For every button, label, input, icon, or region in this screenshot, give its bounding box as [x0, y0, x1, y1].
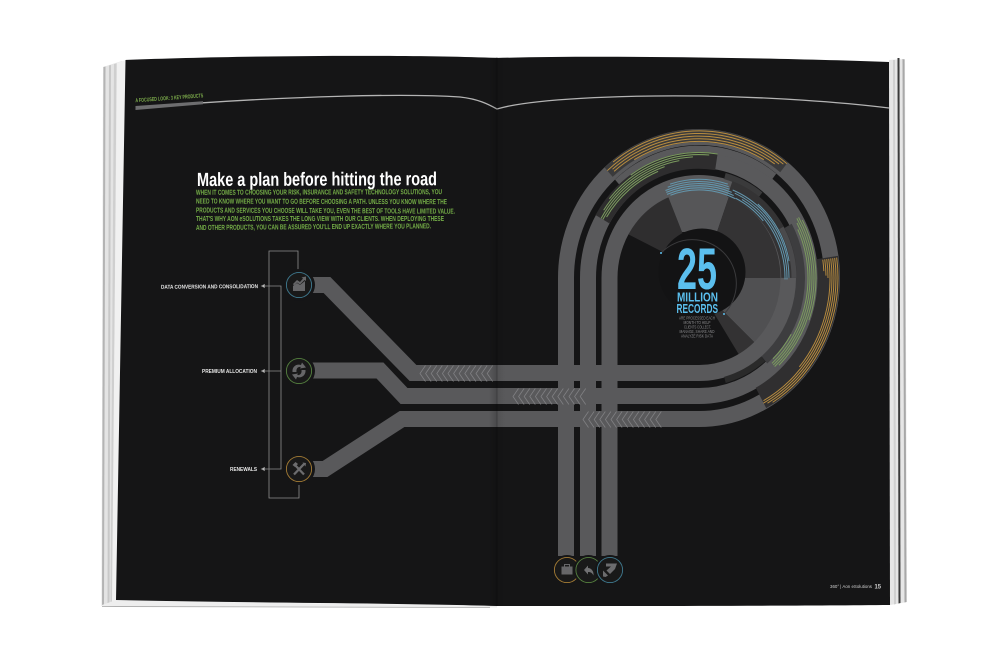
icon: briefcase badge	[552, 555, 582, 585]
page footer: 15	[874, 583, 881, 590]
left page	[116, 56, 497, 606]
data rings	[503, 71, 895, 485]
right page stack edge	[889, 58, 907, 605]
hub: 25 million records: MILLION	[677, 290, 718, 304]
section header: a focused look: A FOCUSED LOOK: 3 KEY PRODUCTS	[135, 93, 204, 104]
labels: products	[161, 284, 258, 473]
road: middle green route	[310, 160, 810, 556]
roads	[310, 137, 832, 556]
hub: 25 million records: CLIENTS COLLECT,	[684, 324, 711, 330]
hub: 25 million records: ARE PROCESSED EACH	[679, 316, 715, 320]
hub: 25 million records: RECORDS	[676, 302, 718, 316]
section header: a focused look	[135, 93, 889, 110]
icon: double arrow badge	[595, 555, 625, 585]
icon: return arrow badge	[574, 555, 604, 585]
gutter shadow	[489, 57, 505, 606]
wedges around hub	[628, 191, 780, 354]
hub: 25 million records	[658, 228, 746, 338]
right page	[497, 57, 890, 606]
chevrons on roads	[420, 366, 661, 428]
icon: data conversion badge	[283, 269, 315, 301]
intro text block	[196, 187, 455, 232]
product bracket and leader lines	[262, 251, 299, 498]
road: outer orange route	[310, 137, 832, 556]
left page stack edge	[102, 60, 497, 608]
hub: 25 million records: MONTH TO HELP	[684, 320, 711, 325]
icon: premium allocation badge	[283, 355, 315, 387]
labels: products: RENEWALS	[230, 467, 257, 473]
title: Make a plan before hitting the road	[197, 169, 437, 191]
page footer	[830, 583, 881, 590]
labels: products: DATA CONVERSION AND CONSOLIDATION	[161, 284, 258, 291]
road: inner blue route	[310, 183, 788, 556]
labels: products: PREMIUM ALLOCATION	[202, 369, 257, 375]
icon: renewals badge	[283, 453, 315, 485]
intro text block: AND OTHER PRODUCTS, YOU CAN BE ASSURED YOU'LL END UP EXACTLY WHERE YOU PLANNED.	[196, 221, 431, 232]
orange data lines	[503, 71, 895, 485]
green data lines	[533, 103, 865, 453]
hub: 25 million records: ANALYZE RISK DATA	[681, 334, 713, 338]
ring segments	[508, 77, 890, 479]
blue data lines	[570, 142, 828, 414]
page footer: 360° | Aon eSolutions	[830, 584, 873, 590]
hub: 25 million records: 25	[677, 237, 717, 302]
intro text block: THAT'S WHY AON eSOLUTIONS TAKES THE LONG VIEW WITH OUR CLIENTS. WHEN DEPLOYING THESE	[196, 214, 444, 223]
intro text block: WHEN IT COMES TO CHOOSING YOUR RISK, INSURANCE AND SAFETY TECHNOLOGY SOLUTIONS, YOU	[196, 187, 442, 197]
intro text block: PRODUCTS AND SERVICES YOU CHOOSE WILL TAKE YOU, EVEN THE BEST OF TOOLS HAVE LIMITED VALUE.	[196, 206, 455, 216]
hub: 25 million records: MANAGE, SHARE AND	[680, 329, 714, 334]
intro text block: NEED TO KNOW WHERE YOU WANT TO GO BEFORE CHOOSING A PATH. UNLESS YOU KNOW WHERE THE	[196, 197, 447, 206]
